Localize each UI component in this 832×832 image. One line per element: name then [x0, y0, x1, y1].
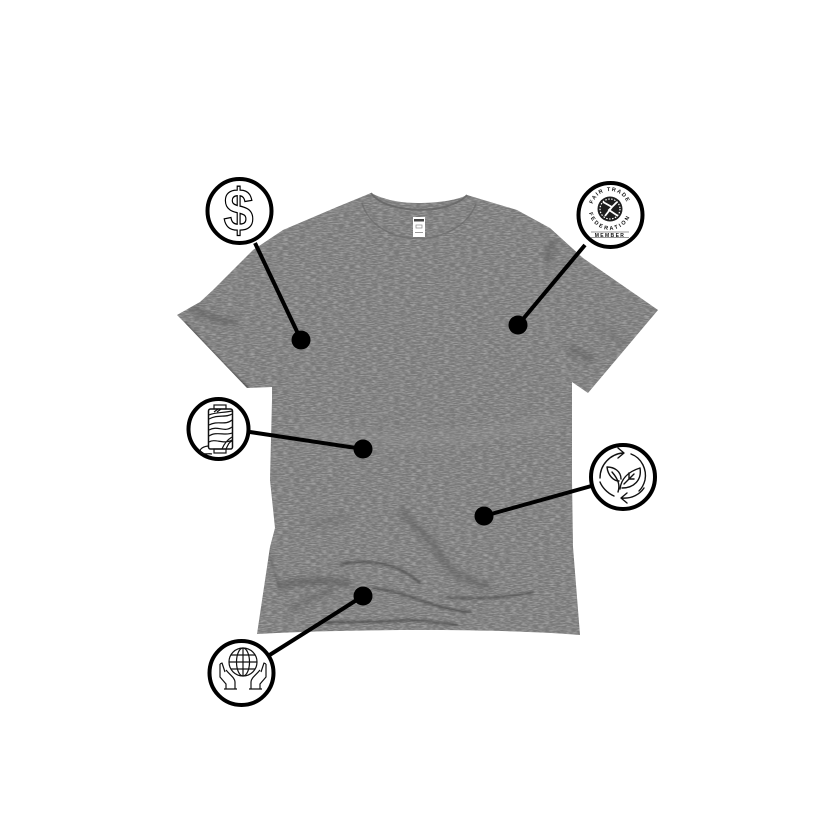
- t-shirt: [177, 193, 658, 635]
- icon: dollar sign: $: [223, 177, 254, 245]
- marker dot: [292, 330, 310, 350]
- marker dot: [508, 316, 528, 334]
- icon: fair trade federation badge: FEDERATION: [589, 212, 630, 230]
- icon: leaves in circular arrows: [600, 448, 645, 503]
- shirt body: [177, 193, 658, 635]
- icon: globe and hands: [220, 648, 266, 689]
- soft fabric folds: [190, 240, 625, 610]
- callout: fair trade: [508, 181, 644, 334]
- callout: recycle leaves: [474, 445, 655, 526]
- neck label: [413, 217, 425, 237]
- collar: [362, 193, 476, 238]
- callout: thread: [188, 399, 372, 459]
- connector line: [250, 432, 363, 449]
- marker dot: [474, 506, 494, 526]
- icon: thread spool: [200, 405, 232, 454]
- icon circle: [591, 445, 655, 509]
- infographic: t-shirt with callouts: [177, 177, 658, 707]
- icon circle: [188, 399, 248, 459]
- marker dot: [354, 440, 372, 458]
- marker dot: [354, 586, 372, 606]
- icon: fair trade federation badge: MEMBER: [595, 233, 625, 239]
- connector line: [255, 243, 301, 340]
- icon: fair trade federation badge: [589, 187, 630, 239]
- connector line: [484, 485, 595, 516]
- icon circle: [208, 179, 272, 243]
- sharp wrinkles and seams: [185, 263, 573, 625]
- callout: globe in hands: [210, 586, 372, 705]
- icon: fair trade federation badge: FAIR TRADE: [589, 187, 630, 204]
- connector line: [518, 245, 585, 325]
- icon circle: [210, 641, 274, 705]
- callout: dollar: [208, 177, 310, 350]
- icon circle: [578, 183, 642, 247]
- connector line: [268, 596, 363, 656]
